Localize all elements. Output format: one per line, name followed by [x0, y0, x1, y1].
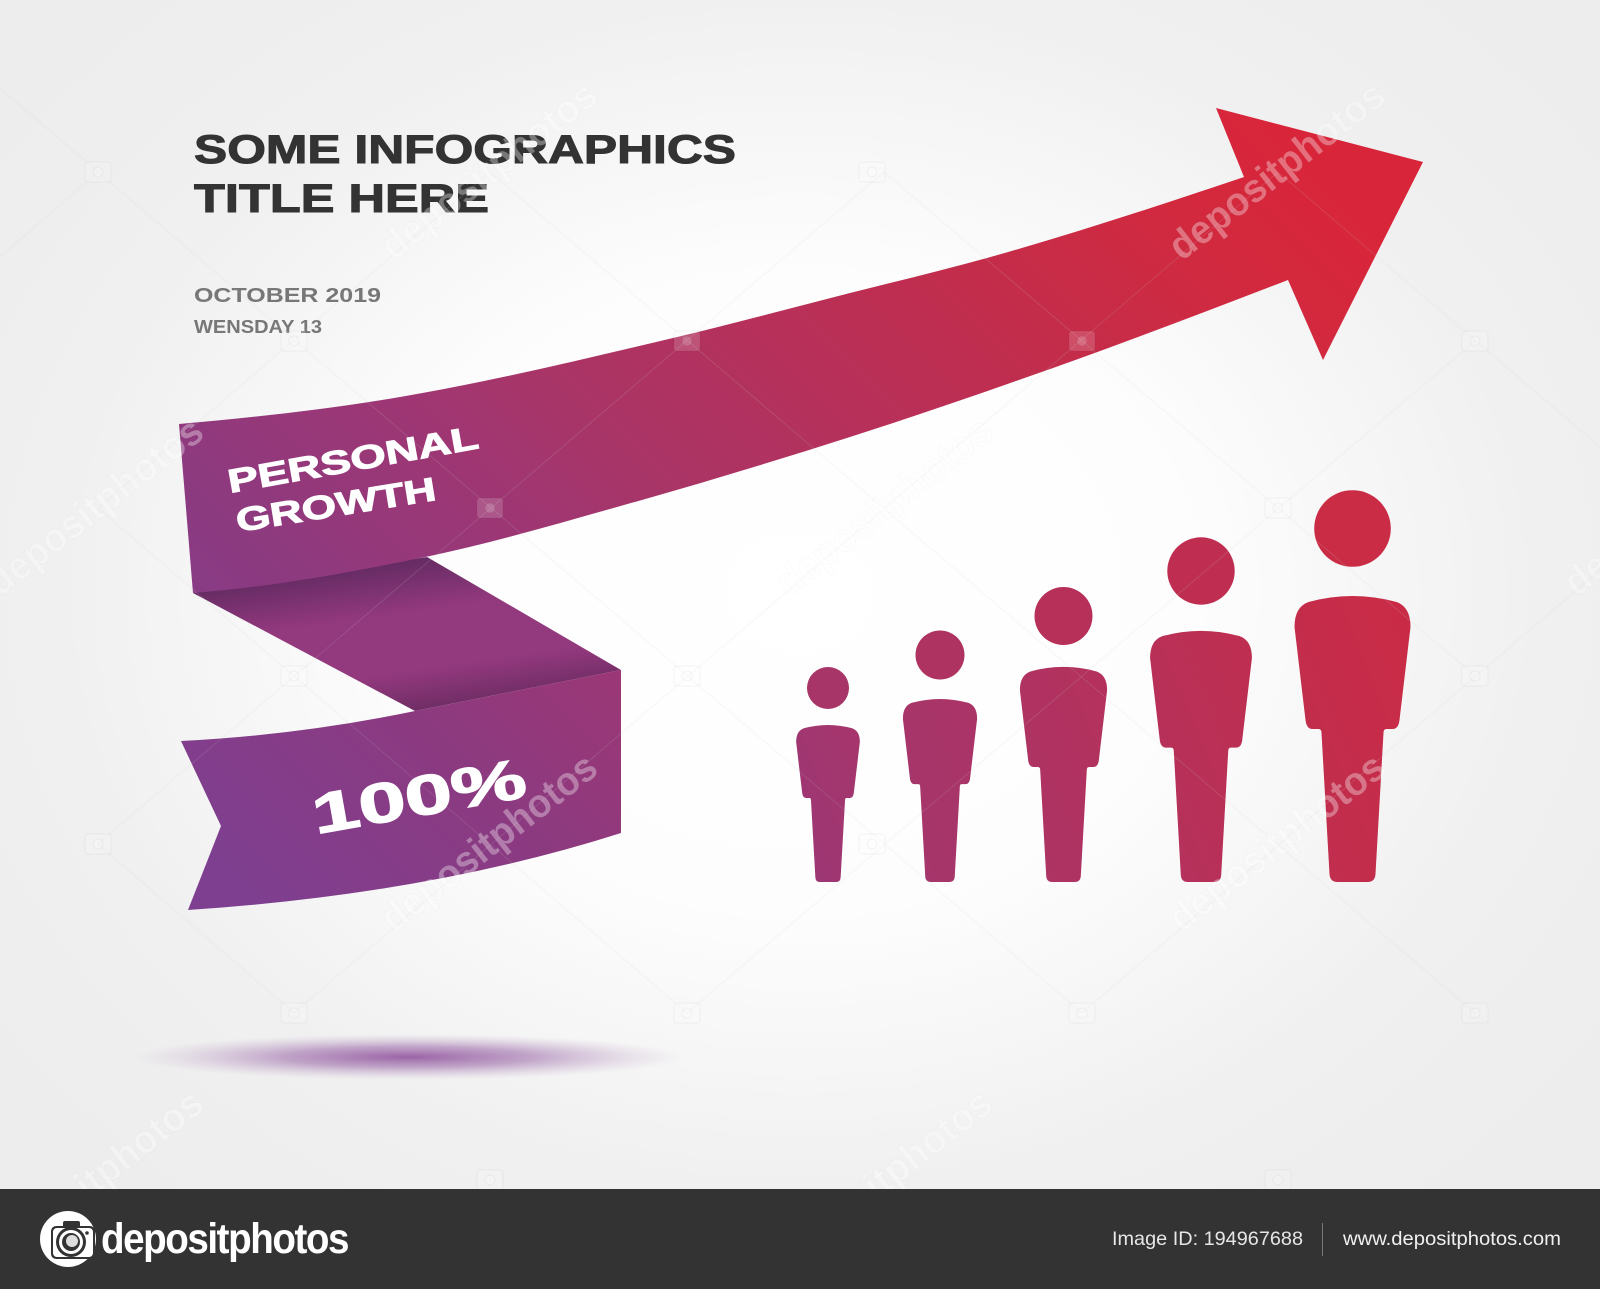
title: SOME INFOGRAPHICS	[194, 128, 736, 172]
title: TITLE HERE	[194, 177, 489, 221]
footer website: www.depositphotos.com	[1342, 1228, 1561, 1250]
footer logo wordmark: depositphotos	[101, 1215, 349, 1263]
ribbon floor shadow	[132, 1034, 684, 1080]
ribbon label: personal growth: PERSONAL	[225, 418, 481, 500]
date: weekday: WENSDAY 13	[194, 317, 322, 337]
lower ribbon tail	[181, 670, 621, 910]
title	[194, 128, 736, 221]
person 1	[796, 667, 860, 882]
watermark text: depositphotos	[767, 409, 1001, 605]
person 4	[1150, 537, 1252, 882]
date: month and year: OCTOBER 2019	[194, 284, 381, 307]
person 3	[1020, 587, 1107, 882]
watermark text: depositphotos	[767, 1081, 1001, 1277]
watermark text: depositphotos	[1160, 745, 1394, 941]
ribbon label: 100 percent: 100%	[307, 746, 531, 846]
footer image id: Image ID: 194967688	[1112, 1228, 1303, 1250]
ribbon label: personal growth	[225, 418, 481, 539]
watermark text: depositphotos	[372, 73, 606, 269]
footer bar	[0, 1189, 1600, 1289]
watermark text: depositphotos	[372, 745, 606, 941]
growth arrow: upper ribbon	[179, 108, 1423, 593]
ribbon fold: shaded middle section	[193, 557, 621, 711]
watermark text: depositphotos	[1160, 73, 1394, 269]
person 5	[1294, 490, 1410, 882]
footer logo icon: camera	[40, 1211, 96, 1267]
person 2	[903, 630, 977, 882]
footer divider	[1322, 1223, 1323, 1256]
ribbon label: personal growth: GROWTH	[233, 470, 439, 539]
watermark camera icons	[85, 162, 1488, 1190]
